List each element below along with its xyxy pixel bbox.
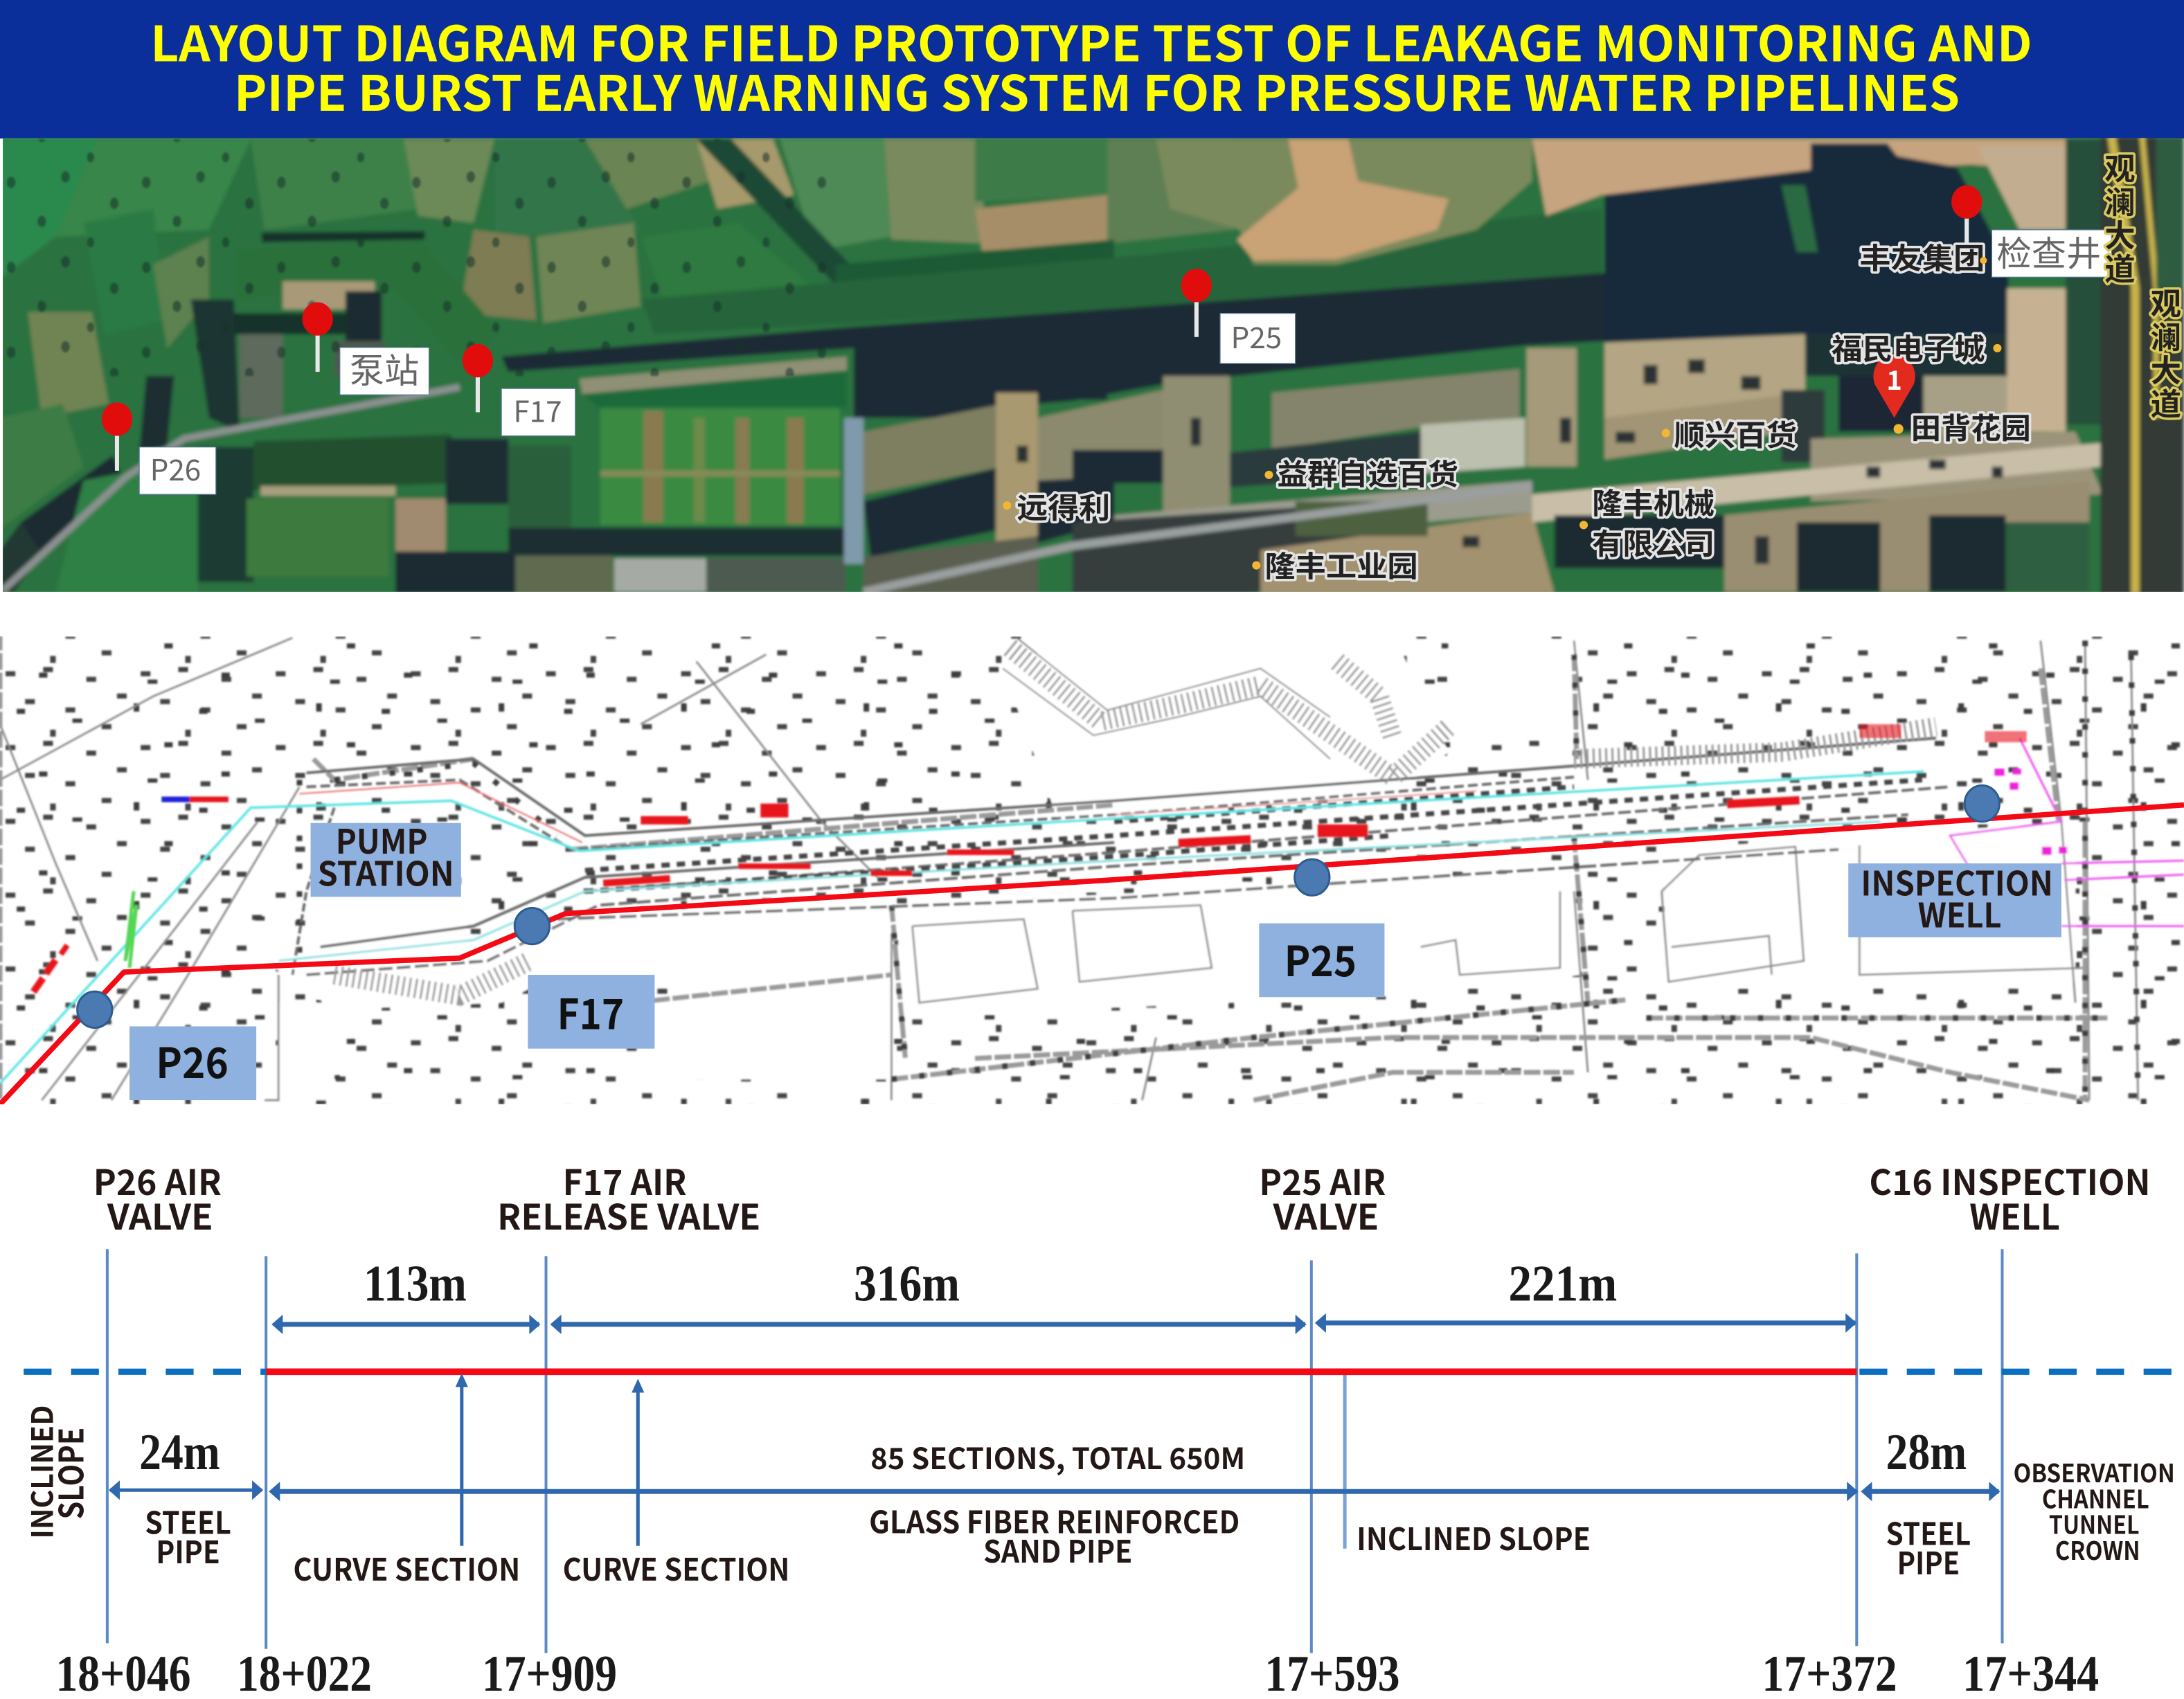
road name 1: 澜 bbox=[2104, 178, 2136, 222]
fields upper-left bbox=[0, 139, 98, 278]
magenta well lines bbox=[1950, 738, 2184, 926]
label box: P25 bbox=[1259, 924, 1384, 997]
inclined slope leader bbox=[1344, 1374, 1345, 1549]
block texture bbox=[1017, 359, 2003, 564]
red annotations bbox=[30, 724, 2027, 994]
road name 1: 道 bbox=[2104, 244, 2136, 289]
dashed pipe left bbox=[24, 1370, 266, 1374]
road name 2: 道 bbox=[2151, 379, 2181, 424]
road name 2: 观 bbox=[2151, 280, 2181, 324]
heading: F17 air release valve: RELEASE VALVE bbox=[497, 1190, 760, 1240]
label: P25: P25 bbox=[1231, 315, 1282, 357]
note: observation channel tunnel crown: CHANNEL bbox=[2042, 1480, 2149, 1516]
length: 24m: 24m bbox=[139, 1424, 220, 1481]
length: 221m: 221m bbox=[1508, 1256, 1617, 1313]
length: 316m: 316m bbox=[854, 1256, 960, 1313]
note: inclined slope rotated bbox=[19, 1405, 93, 1539]
note: glass fiber reinforced sand pipe: SAND PIPE bbox=[983, 1527, 1132, 1572]
length: 28m: 28m bbox=[1886, 1424, 1967, 1481]
heading: C16 inspection well bbox=[1869, 1156, 2151, 1240]
road name 2: 大 bbox=[2151, 346, 2181, 390]
green mark bbox=[125, 891, 136, 968]
place names: 丰友集团 bbox=[1859, 235, 1985, 278]
title line 1: LAYOUT DIAGRAM FOR FIELD PROTOTYPE TEST OF LEAKAGE MONITORING AND bbox=[150, 6, 2032, 76]
label box: pump station bbox=[311, 815, 461, 897]
marker: P26 node bbox=[78, 991, 112, 1027]
label box: inspection well bbox=[1848, 856, 2061, 937]
note: steel pipe left bbox=[145, 1499, 231, 1572]
label: F17: F17 bbox=[513, 388, 562, 431]
satellite imagery blocks bbox=[0, 136, 2184, 596]
note: glass fiber reinforced sand pipe bbox=[869, 1498, 1239, 1572]
label: P25 bbox=[1220, 314, 1296, 363]
label: inspection well: 检查井 bbox=[1996, 226, 2101, 276]
vertical light strip and middle buildings bbox=[844, 417, 863, 564]
label box: inspection well: WELL bbox=[1918, 889, 2001, 937]
label: pump station: 泵站 bbox=[350, 343, 419, 393]
pin: inspection well bbox=[1951, 186, 1982, 264]
place names: 福民电子城 bbox=[1832, 326, 1985, 368]
heading: C16 inspection well: C16 INSPECTION bbox=[1869, 1156, 2151, 1205]
large dark shadow bbox=[1604, 143, 2009, 343]
pump station bbox=[283, 281, 375, 309]
topographic scatter marks bbox=[0, 633, 2184, 1104]
note: inclined slope: INCLINED SLOPE bbox=[1357, 1515, 1591, 1559]
note: observation channel tunnel crown: TUNNEL bbox=[2049, 1506, 2140, 1542]
plan background bbox=[0, 636, 2184, 1104]
label box: P25: P25 bbox=[1285, 928, 1357, 989]
heading: F17 air release valve bbox=[497, 1156, 760, 1240]
note: observation channel tunnel crown: OBSERVATION bbox=[2014, 1454, 2175, 1490]
panel: satellite map bbox=[0, 136, 2184, 596]
red pipeline bbox=[0, 805, 2184, 1104]
label: P26: P26 bbox=[150, 447, 201, 489]
pin: P25 bbox=[1181, 269, 1212, 337]
tree dots in fields bbox=[0, 139, 836, 376]
cyan line bbox=[0, 771, 1924, 1084]
marker: inspection well node bbox=[1964, 785, 1999, 822]
dimension arrow: 221m bbox=[1315, 1313, 1856, 1333]
length: 113m: 113m bbox=[364, 1256, 467, 1313]
place names: 隆丰工业园 bbox=[1264, 543, 1418, 586]
panel: CAD topographic plan bbox=[0, 633, 2184, 1104]
right residential bbox=[1604, 334, 1805, 417]
dimension arrow: 28m bbox=[1861, 1482, 2000, 1501]
marker: P25 node bbox=[1295, 859, 1330, 895]
heading: F17 air release valve: F17 AIR bbox=[563, 1156, 687, 1205]
note: curve section 1: CURVE SECTION bbox=[293, 1545, 520, 1590]
arrow: curve section 2 bbox=[632, 1378, 644, 1546]
heading: P26 air valve bbox=[93, 1156, 222, 1240]
place names bbox=[1017, 144, 2181, 586]
label box: P26 bbox=[129, 1026, 256, 1100]
location dots bbox=[1003, 257, 2001, 570]
note: observation channel tunnel crown: CROWN bbox=[2055, 1531, 2140, 1567]
road name 2: 澜 bbox=[2151, 313, 2181, 357]
label: P26 bbox=[139, 447, 216, 494]
slope hatch symbols bbox=[334, 647, 1936, 996]
right edge highway bbox=[2100, 136, 2184, 596]
heading: P26 air valve: P26 AIR bbox=[93, 1156, 222, 1205]
place names: 隆丰机械 bbox=[1592, 480, 1715, 523]
label box: F17 bbox=[528, 975, 654, 1049]
place names: 田背花园 bbox=[1911, 406, 2031, 448]
middle dark blocks bbox=[863, 406, 978, 420]
place names: 益群自选百货 bbox=[1278, 451, 1458, 494]
note: steel pipe right bbox=[1886, 1510, 1971, 1583]
road name 1: 大 bbox=[2104, 211, 2136, 255]
pipeline corridor linework bbox=[292, 738, 1950, 975]
panel: pipeline section diagram bbox=[19, 1156, 2176, 1699]
heading: P25 air valve: P25 AIR bbox=[1259, 1156, 1386, 1205]
label box: F17: F17 bbox=[557, 981, 624, 1041]
place names: 远得利 bbox=[1017, 485, 1110, 527]
roads bbox=[3, 387, 460, 591]
dimension arrow: 24m bbox=[109, 1480, 263, 1500]
note: inclined slope rotated: INCLINED bbox=[19, 1405, 62, 1539]
note: curve section 2: CURVE SECTION bbox=[563, 1545, 790, 1590]
place names: 顺兴百货 bbox=[1674, 413, 1797, 455]
note: 85 sections: 85 SECTIONS, TOTAL 650M bbox=[870, 1436, 1245, 1478]
property outlines bbox=[0, 638, 2138, 1100]
label box: pump station: STATION bbox=[318, 847, 454, 895]
station vertical lines bbox=[107, 1249, 2002, 1653]
pins and labels on satellite map bbox=[102, 144, 2181, 586]
title banner bbox=[0, 0, 2184, 138]
marker: number 1 bbox=[1873, 354, 1915, 417]
red pipe section bbox=[266, 1370, 1856, 1374]
marker: number 1: 1 bbox=[1886, 360, 1902, 398]
note: inclined slope rotated: SLOPE bbox=[45, 1428, 93, 1520]
dimension arrow: 113m bbox=[271, 1315, 540, 1334]
shadows left bbox=[262, 231, 425, 242]
title line 2: PIPE BURST EARLY WARNING SYSTEM FOR PRESSURE WATER PIPELINES bbox=[234, 55, 1960, 125]
label box: P26: P26 bbox=[156, 1030, 229, 1090]
note: steel pipe right: STEEL bbox=[1886, 1510, 1971, 1554]
thick blurred road and lot lines bbox=[0, 633, 2107, 1100]
note: steel pipe left: PIPE bbox=[156, 1528, 220, 1572]
pin: F17 bbox=[463, 344, 493, 412]
green stripe farm bbox=[600, 408, 840, 525]
note: glass fiber reinforced sand pipe: GLASS FIBER REINFORCED bbox=[869, 1498, 1239, 1543]
heading: P25 air valve bbox=[1259, 1156, 1386, 1240]
marker: F17 node bbox=[514, 908, 550, 944]
place names: 有限公司 bbox=[1592, 521, 1715, 564]
clear building lots bbox=[265, 633, 2075, 1100]
dimension arrow: 85 sections bbox=[269, 1482, 1858, 1501]
canal shadow band bbox=[501, 273, 1604, 417]
dashed pipe right bbox=[1859, 1370, 2176, 1374]
note: steel pipe right: PIPE bbox=[1897, 1539, 1960, 1583]
label: F17 bbox=[501, 388, 575, 436]
pin: P26 bbox=[102, 402, 132, 471]
pin: pump station bbox=[302, 302, 333, 372]
heading: P26 air valve: VALVE bbox=[107, 1190, 213, 1240]
road name 1: 观 bbox=[2104, 144, 2136, 188]
heading: C16 inspection well: WELL bbox=[1969, 1190, 2060, 1240]
note: observation channel tunnel crown bbox=[2014, 1454, 2175, 1567]
label box: pump station: PUMP bbox=[336, 815, 428, 863]
arrow: curve section 1 bbox=[456, 1373, 468, 1546]
dimension arrow: 316m bbox=[551, 1315, 1307, 1334]
label box: inspection well: INSPECTION bbox=[1861, 856, 2053, 905]
note: steel pipe left: STEEL bbox=[145, 1499, 231, 1543]
soil mound bbox=[1156, 139, 1532, 264]
heading: P25 air valve: VALVE bbox=[1272, 1190, 1379, 1240]
